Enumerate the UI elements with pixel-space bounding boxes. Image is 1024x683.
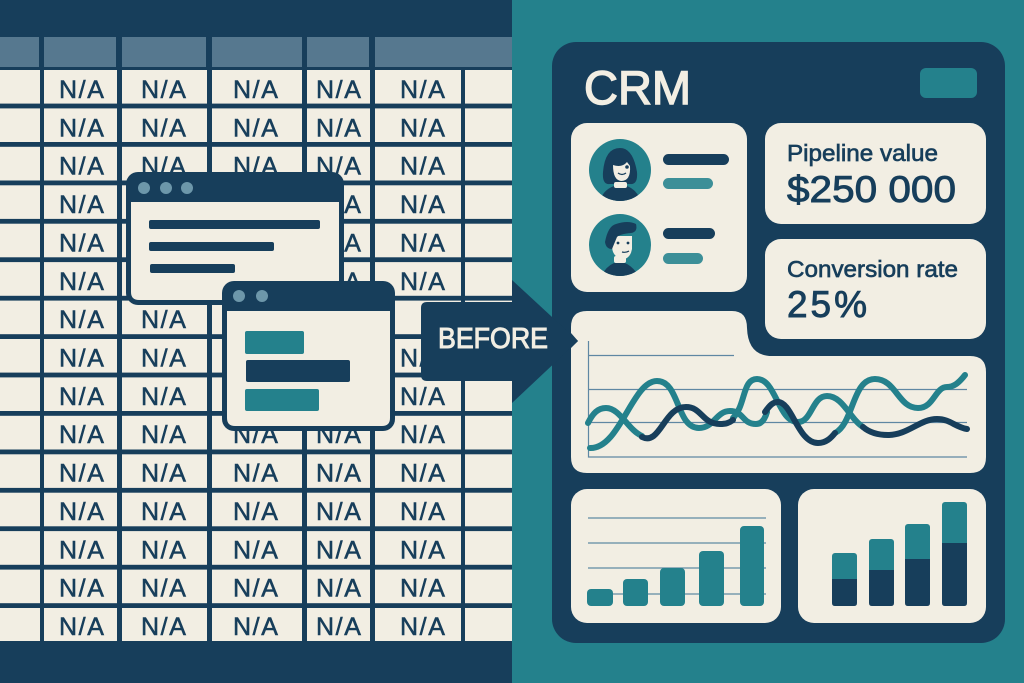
N/A cell values: N/A [316, 536, 362, 564]
bar chart: stacked [798, 489, 986, 623]
N/A cell values: N/A [59, 498, 105, 526]
N/A cell values: N/A [400, 153, 446, 181]
bar chart: rising single series [571, 489, 781, 623]
panel: spreadsheet full of N/A values [0, 37, 512, 641]
N/A cell values: N/A [400, 421, 446, 449]
N/A cell values: N/A [316, 575, 362, 603]
panel: CRM dashboard [552, 42, 1005, 643]
N/A cell values: N/A [233, 76, 279, 104]
N/A cell values: N/A [59, 421, 105, 449]
navy series [642, 402, 967, 443]
N/A cell values: N/A [141, 306, 187, 334]
N/A cell values: N/A [400, 536, 446, 564]
contact 2 text bars [663, 228, 715, 264]
N/A cell values: N/A [233, 536, 279, 564]
N/A cell values: N/A [141, 76, 187, 104]
N/A cell values: N/A [233, 421, 279, 449]
N/A cell values: N/A [59, 76, 105, 104]
N/A cell values: N/A [141, 460, 187, 488]
N/A cell values: N/A [141, 114, 187, 142]
N/A cell values: N/A [59, 344, 105, 372]
N/A cell values: N/A [233, 575, 279, 603]
N/A cell values: N/A [400, 76, 446, 104]
label: pipeline value: Pipeline value [787, 140, 938, 166]
panel: contacts [571, 123, 747, 292]
N/A cell values: N/A [141, 575, 187, 603]
N/A cell values: N/A [400, 191, 446, 219]
N/A cell values: N/A [400, 613, 446, 641]
N/A cell values: N/A [316, 613, 362, 641]
N/A cell values: N/A [316, 114, 362, 142]
N/A cell values: N/A [59, 613, 105, 641]
N/A cell values: N/A [316, 191, 362, 219]
N/A cell values: N/A [141, 344, 187, 372]
label: conversion rate: Conversion rate [787, 256, 958, 282]
N/A cell values: N/A [316, 460, 362, 488]
N/A cell values: N/A [400, 575, 446, 603]
N/A cell values: N/A [59, 114, 105, 142]
N/A cell values: N/A [59, 383, 105, 411]
N/A cell values: N/A [316, 153, 362, 181]
line chart [571, 311, 986, 473]
N/A cell values: N/A [400, 344, 446, 372]
contact 1 text bars [663, 154, 729, 189]
N/A cell values: N/A [141, 153, 187, 181]
icon: bars window [222, 281, 395, 431]
teal series [588, 375, 965, 448]
N/A cell values: N/A [233, 460, 279, 488]
label: BEFORE: BEFORE [438, 323, 548, 355]
N/A cell values: N/A [141, 421, 187, 449]
N/A cell values: N/A [233, 153, 279, 181]
icon: man avatar [589, 214, 651, 277]
icon: woman avatar [589, 139, 651, 201]
table header row [0, 37, 512, 67]
N/A cell values: N/A [141, 498, 187, 526]
N/A cell values: N/A [316, 229, 362, 257]
N/A cell values: N/A [59, 268, 105, 296]
N/A cell values: N/A [233, 498, 279, 526]
N/A cell values: N/A [316, 498, 362, 526]
N/A cell values: N/A [141, 536, 187, 564]
number: pipeline amount: $250 000 [787, 169, 956, 210]
N/A cell values: N/A [400, 383, 446, 411]
N/A cell values: N/A [233, 114, 279, 142]
N/A cell values: N/A [141, 613, 187, 641]
heading: CRM: CRM [584, 61, 691, 114]
N/A cell values: N/A [400, 498, 446, 526]
N/A cell values: N/A [316, 76, 362, 104]
N/A cell values: N/A [400, 460, 446, 488]
teal header button [920, 68, 977, 98]
number: conversion percentage: 25% [787, 284, 867, 325]
N/A cell values: N/A [59, 153, 105, 181]
panel: conversion rate [765, 239, 986, 339]
N/A cell values: N/A [400, 229, 446, 257]
N/A cell values: N/A [400, 268, 446, 296]
N/A cell values: N/A [59, 191, 105, 219]
arrow: before label pointing to CRM [421, 280, 578, 403]
N/A cell values: N/A [59, 229, 105, 257]
table cells grid [0, 70, 512, 641]
N/A cell values: N/A [59, 536, 105, 564]
N/A cell values: N/A [316, 421, 362, 449]
N/A cell values: N/A [316, 268, 362, 296]
N/A cell values: N/A [59, 575, 105, 603]
panel: pipeline value [765, 123, 986, 224]
N/A cell values: N/A [141, 383, 187, 411]
N/A cell values: N/A [233, 613, 279, 641]
N/A cell values: N/A [59, 460, 105, 488]
N/A cell values: N/A [400, 114, 446, 142]
N/A cell values: N/A [59, 306, 105, 334]
icon: text document window [126, 172, 344, 305]
N/A cell values [59, 76, 446, 641]
